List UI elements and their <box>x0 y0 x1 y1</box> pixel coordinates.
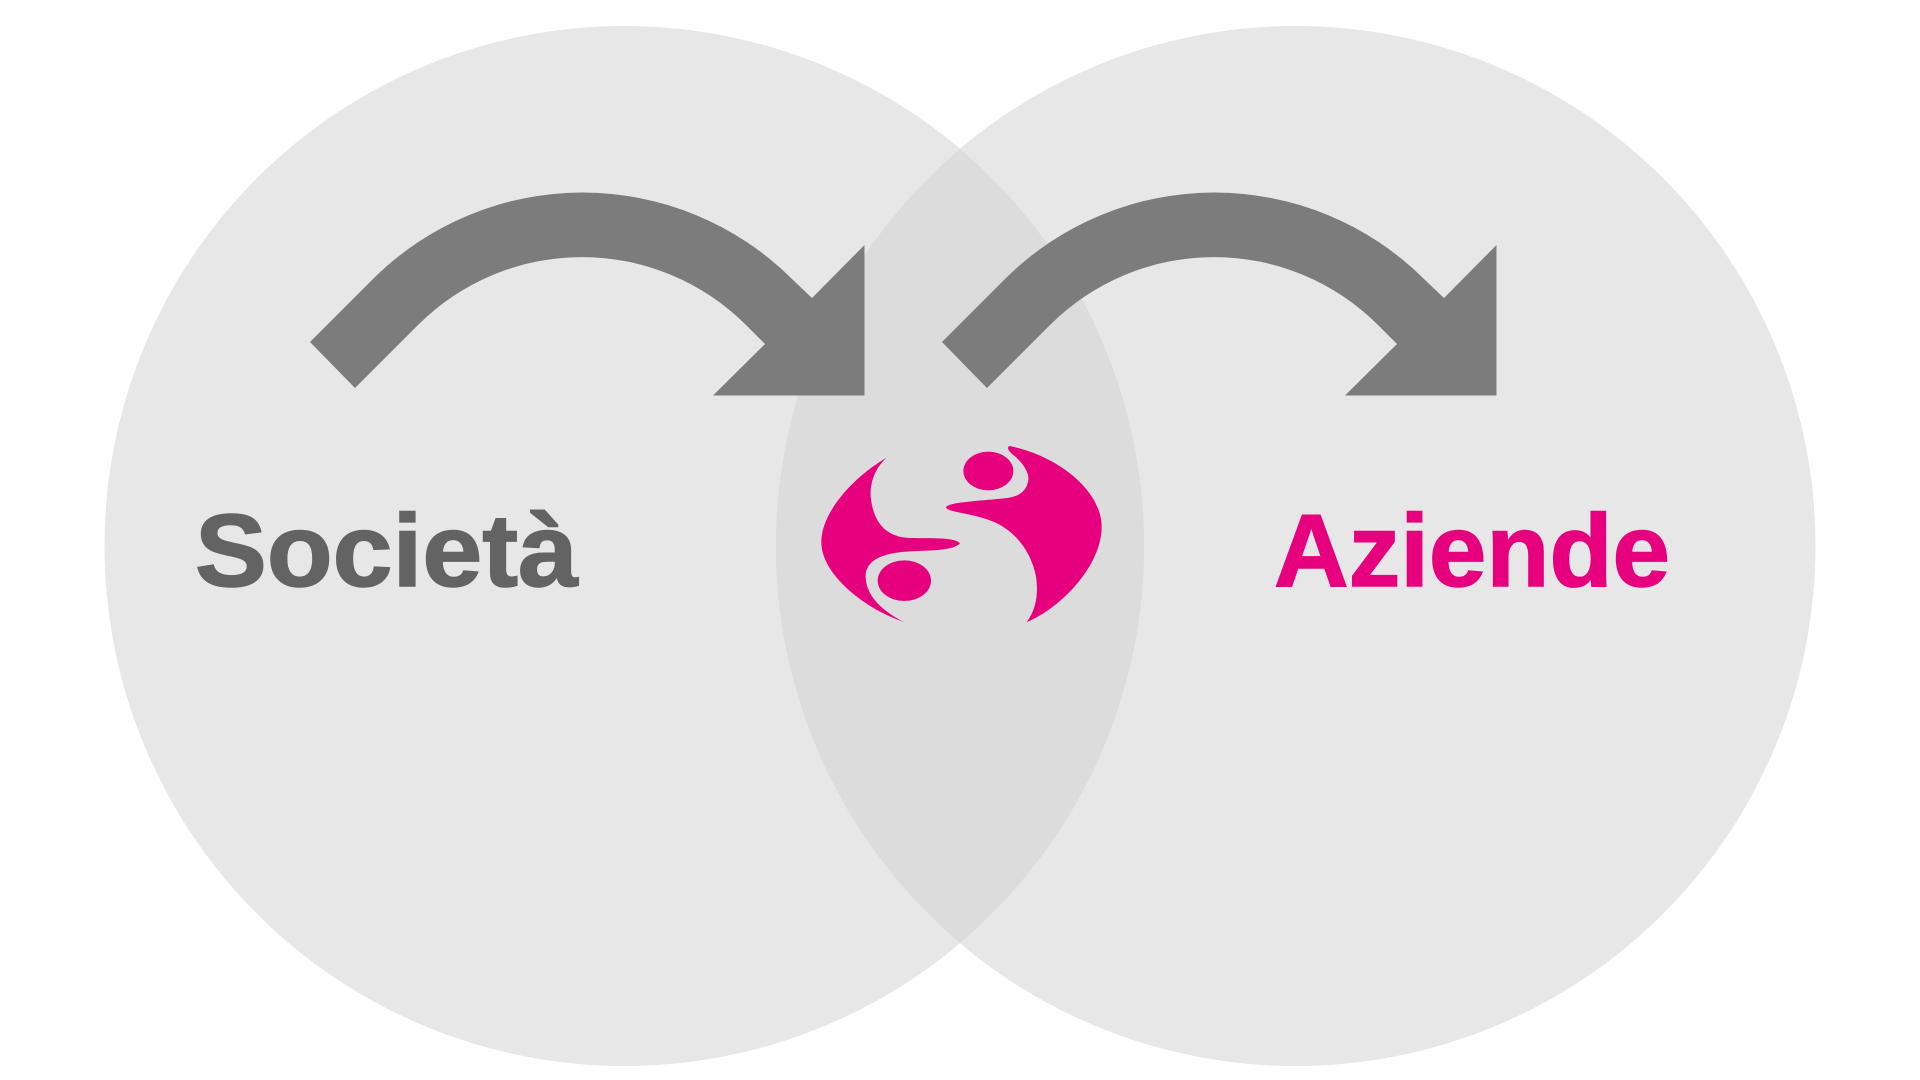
arrow: centre to aziende <box>942 193 1496 396</box>
label: Società: Società <box>195 493 579 608</box>
circle: società <box>104 26 1144 1066</box>
logo <box>821 446 1102 622</box>
logo: right figure head <box>963 452 1013 490</box>
overlap lens <box>776 149 1144 943</box>
logo: right figure body <box>946 446 1102 622</box>
label: Aziende: Aziende <box>1274 493 1670 608</box>
logo: left figure body <box>821 458 960 622</box>
logo: left figure head <box>878 560 931 601</box>
circle: aziende <box>776 26 1816 1066</box>
arrow: società to centre <box>310 193 864 396</box>
